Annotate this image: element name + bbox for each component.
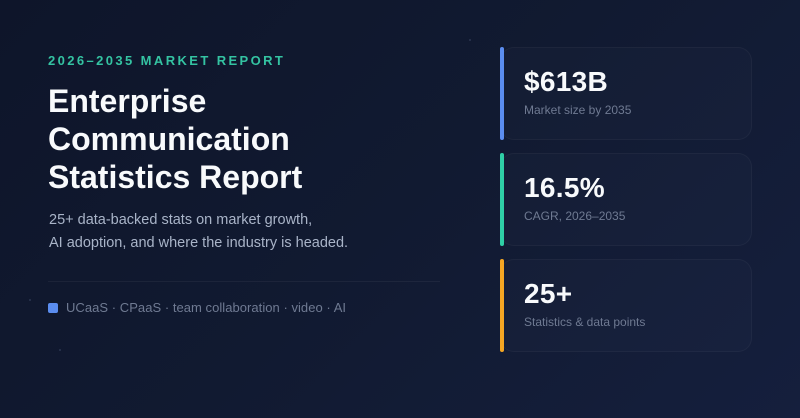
stat: 16.5%: 16.5% [524, 172, 605, 203]
card background [500, 259, 752, 352]
stat: $613B: $613B [524, 66, 608, 97]
eyebrow label: 2026–2035 MARKET REPORT [48, 53, 285, 68]
title: Communication [48, 121, 290, 157]
subtitle: 25+ data-backed stats on market growth, [49, 212, 312, 228]
title: Statistics Report [48, 159, 302, 195]
topic list: UCaaS · CPaaS · team collaboration · video · AI [66, 300, 346, 315]
icon: blue square [48, 303, 58, 313]
stat label: CAGR, 2026–2035 [524, 209, 625, 223]
card background [500, 47, 752, 140]
panel: market size card [500, 47, 752, 140]
panel: statistics count card [500, 259, 752, 352]
card background [500, 153, 752, 246]
green accent bar [500, 153, 504, 246]
title [48, 83, 302, 195]
subtitle [49, 212, 348, 251]
panel: CAGR card [500, 153, 752, 246]
stat label: Market size by 2035 [524, 103, 631, 117]
topic tags [48, 300, 346, 315]
title: Enterprise [48, 83, 206, 119]
blue accent bar [500, 47, 504, 140]
amber accent bar [500, 259, 504, 352]
subtitle: AI adoption, and where the industry is headed. [49, 235, 348, 251]
stat label: Statistics & data points [524, 315, 645, 329]
stat: 25+: 25+ [524, 278, 572, 309]
